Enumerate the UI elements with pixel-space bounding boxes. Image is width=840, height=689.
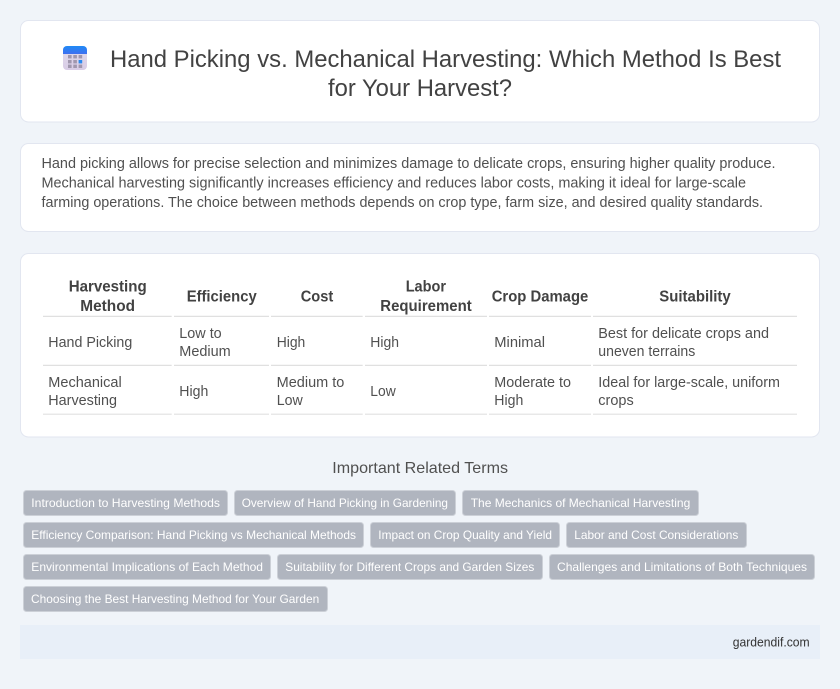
table row: mechanical harvesting: High: [494, 393, 523, 409]
table row: mechanical harvesting: Medium to: [277, 375, 344, 391]
chip: Introduction to Harvesting Methods: [31, 496, 220, 510]
table row: mechanical harvesting: Harvesting: [48, 393, 117, 409]
chip: [24, 522, 364, 548]
heading: important related terms: Important Related Terms: [332, 460, 508, 477]
icon: calendar: [63, 46, 87, 70]
table header row: [69, 278, 731, 315]
chip: [370, 522, 560, 548]
panel: related term chips: [24, 490, 814, 612]
table row: mechanical harvesting: crops: [598, 393, 634, 409]
table header row: Method: [80, 298, 135, 315]
chip: Choosing the Best Harvesting Method for Your Garden: [31, 592, 319, 606]
table row: hand picking: High: [277, 335, 305, 351]
table header row: Harvesting: [69, 278, 147, 296]
table row: hand picking: Hand Picking: [48, 335, 132, 351]
text block: summary: farming operations. The choice between methods depends on crop type, farm size, and desired quality standards.: [42, 195, 763, 211]
chip: [550, 554, 814, 580]
table row: mechanical harvesting: [48, 375, 780, 409]
table row: mechanical harvesting: Low: [370, 384, 396, 400]
chip: [24, 490, 228, 516]
chip: The Mechanics of Mechanical Harvesting: [471, 496, 690, 510]
title: Hand Picking vs. Mechanical Harvesting: Which Method Is Best: [110, 46, 781, 73]
text block: summary: Mechanical harvesting significantly increases efficiency and reduces labor costs, making it ideal for large-scale: [42, 176, 746, 192]
chip: [24, 586, 328, 612]
table row: hand picking: Best for delicate crops and: [598, 326, 769, 342]
table header row: Suitability: [659, 288, 731, 306]
table header row: Labor: [406, 278, 446, 296]
title: for Your Harvest?: [328, 75, 512, 102]
chip: Challenges and Limitations of Both Techniques: [557, 560, 807, 574]
table row: mechanical harvesting: Mechanical: [48, 375, 122, 391]
panel: header: [20, 20, 820, 122]
footer: gardendif.com: [733, 635, 810, 649]
chip: Suitability for Different Crops and Garden Sizes: [285, 560, 534, 574]
chip: Overview of Hand Picking in Gardening: [242, 496, 448, 510]
chip: Environmental Implications of Each Method: [31, 560, 263, 574]
table row: mechanical harvesting: Low: [277, 393, 303, 409]
table row: hand picking: Medium: [179, 344, 231, 360]
chip: [462, 490, 698, 516]
table row: mechanical harvesting: High: [179, 384, 208, 400]
panel: summary text: [20, 144, 820, 232]
panel: comparison table: [20, 254, 820, 437]
footer: [20, 625, 820, 659]
table header row: Efficiency: [187, 288, 257, 306]
chip: [234, 490, 456, 516]
table row: hand picking: [48, 326, 769, 360]
table header row: Requirement: [380, 298, 472, 315]
table row: hand picking: Low to: [179, 326, 222, 342]
title: [110, 46, 781, 102]
table header row: Cost: [301, 288, 333, 306]
table row: mechanical harvesting: Moderate to: [494, 375, 571, 391]
table row: hand picking: Minimal: [494, 335, 545, 351]
chip: [24, 554, 270, 580]
text block: summary: [42, 156, 776, 211]
table row: hand picking: High: [370, 335, 399, 351]
chip: Labor and Cost Considerations: [574, 528, 738, 542]
table row: hand picking: uneven terrains: [598, 344, 695, 360]
chip: [278, 554, 542, 580]
table row: mechanical harvesting: Ideal for large-scale, uniform: [598, 375, 780, 391]
text block: summary: Hand picking allows for precise selection and minimizes damage to delicate crops, ensuring higher quality produce.: [42, 156, 776, 172]
chip: Efficiency Comparison: Hand Picking vs Mechanical Methods: [31, 528, 356, 542]
chip: Impact on Crop Quality and Yield: [378, 528, 552, 542]
chip: [566, 522, 746, 548]
table header row: Crop Damage: [492, 288, 589, 306]
